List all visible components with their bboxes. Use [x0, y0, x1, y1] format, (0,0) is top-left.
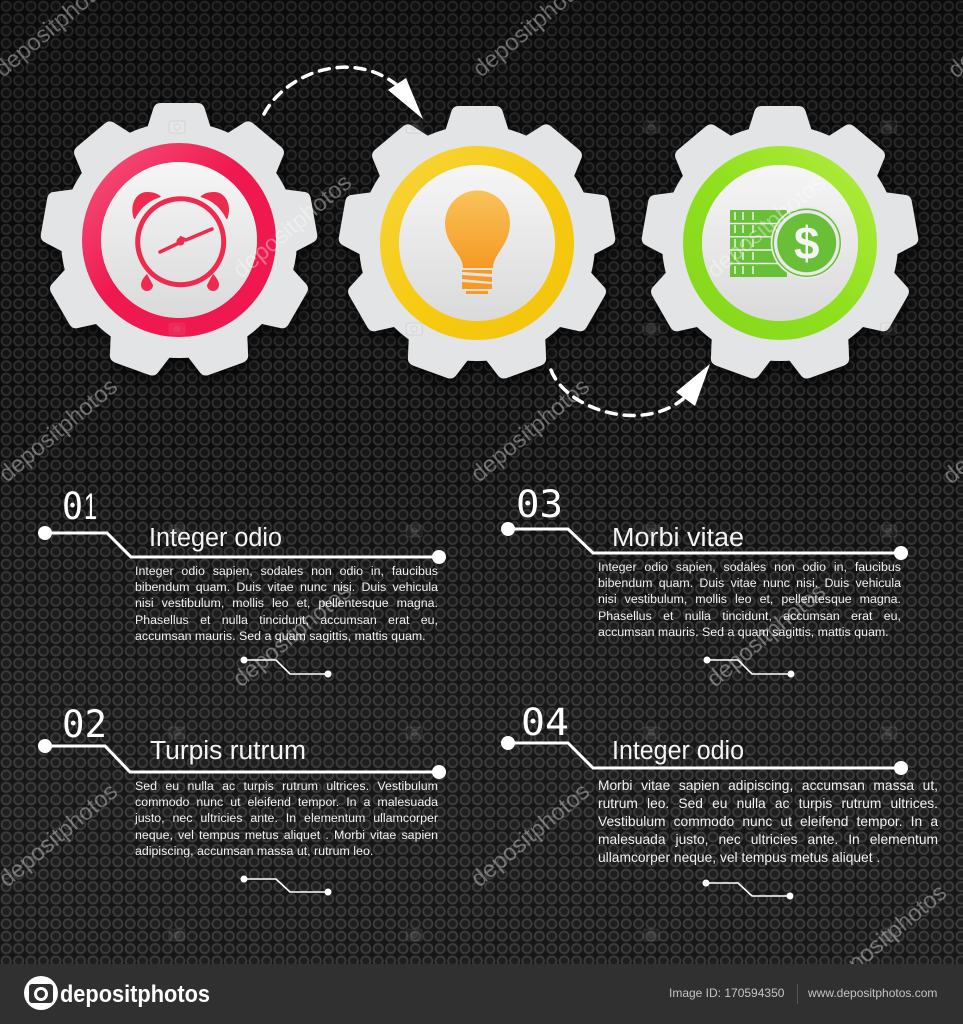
footer image id: Image ID: 170594350 [669, 986, 784, 1000]
red ring [92, 152, 266, 328]
number 01: 1 [84, 486, 97, 527]
icon: coin stack and dollar [730, 207, 843, 279]
text block 01: bibendum quam. Duis vitae nunc nisi. Duis vehicula [135, 580, 438, 594]
text block 02: justo, nec ultricies ante. In elementum ullamcorper [135, 811, 438, 825]
text block 01 [135, 564, 438, 643]
text block 01: accumsan mauris. Sed a quam sagittis, mattis quam. [135, 629, 426, 643]
text block 02: commodo nunc ut eleifend tempor. In a malesuada [135, 795, 438, 809]
connector 02 [38, 739, 446, 779]
text block 02: neque, vel tempus metus aliquet . Morbi vitae sapien [135, 828, 438, 842]
footer logo [24, 976, 210, 1010]
text block 03: Integer odio sapien, sodales non odio in, faucibus [598, 560, 901, 574]
text block 02: Sed eu nulla ac turpis rutrum ultrices. Vestibulum [135, 779, 438, 793]
watermarks: depositphotos [465, 778, 594, 892]
gear 1: alarm clock [41, 105, 317, 377]
text block 02: adipiscing, accumsan massa ut, rutrum leo. [135, 844, 373, 858]
arrow: gear 2 to gear 3 [551, 364, 710, 415]
watermarks: depositphotos [701, 169, 830, 283]
text block 03: accumsan mauris. Sed a quam sagittis, mattis quam. [598, 625, 889, 639]
watermarks: depositphotos [822, 879, 951, 993]
connector 01 [38, 526, 446, 564]
text block 04: ullamcorper neque, vel tempus metus aliquet . [598, 850, 880, 865]
heading 01: Integer odio [149, 524, 282, 552]
text block 01: Phasellus et nulla tincidunt, accumsan erat eu, [135, 613, 438, 627]
footer bar [0, 964, 963, 1024]
icon: coin stack and dollar: $ [794, 217, 819, 269]
watermarks: depositphotos [465, 373, 594, 487]
watermarks: depositphotos [701, 578, 830, 692]
icon: alarm clock [132, 192, 229, 291]
text block 04: malesuada justo, nec ultricies ante. In elementum [598, 832, 938, 847]
text block 04 [598, 778, 938, 865]
gear 3: coins [642, 108, 918, 380]
yellow ring [390, 156, 564, 330]
inner disc [399, 165, 555, 321]
text block 01: Integer odio sapien, sodales non odio in, faucibus [135, 564, 438, 578]
connector 03 [501, 522, 908, 560]
number 01 [62, 485, 97, 528]
mini connector 01 [240, 656, 332, 678]
gear 2: light bulb [339, 108, 615, 380]
text block 02 [134, 779, 438, 858]
text block 04: rutrum leo. Sed eu nulla ac turpis rutrum ultrices. [598, 796, 938, 811]
number 01: 0 [62, 485, 83, 528]
mini connector 03 [704, 656, 794, 678]
arrow: gear 1 to gear 2 [264, 67, 423, 119]
text block 03 [598, 560, 902, 639]
watermarks: depositphotos [227, 169, 356, 283]
connector 04 [501, 736, 908, 775]
mini connector 02 [240, 876, 332, 896]
number 04: 04 [521, 701, 569, 744]
text block 04: Vestibulum commodo nunc ut eleifend tempor. In a [598, 814, 938, 829]
heading 03: Morbi vitae [612, 524, 744, 552]
icon: light bulb [445, 190, 510, 294]
inner disc [702, 165, 858, 321]
text block 03: Phasellus et nulla tincidunt, accumsan erat eu, [598, 609, 901, 623]
text block 03: nisi vestibulum, mollis leo et, pellentesque magna. [598, 592, 901, 606]
heading 02: Turpis rutrum [150, 737, 306, 765]
heading 04: Integer odio [612, 737, 744, 765]
inner disc [101, 162, 257, 318]
footer url: www.depositphotos.com [808, 986, 937, 1000]
number 03: 03 [516, 483, 563, 526]
green ring [692, 156, 868, 330]
footer divider [797, 984, 798, 1004]
text block 04: Morbi vitae sapien adipiscing, accumsan massa ut, [598, 778, 938, 793]
text block 01: nisi vestibulum, mollis leo et, pellentesque magna. [135, 596, 438, 610]
number 02: 02 [62, 703, 107, 746]
watermarks: depositphotos [227, 578, 356, 692]
mini connector 04 [702, 880, 794, 900]
footer logo: depositphotos [60, 981, 210, 1008]
text block 03: bibendum quam. Duis vitae nunc nisi. Duis vehicula [598, 576, 901, 590]
